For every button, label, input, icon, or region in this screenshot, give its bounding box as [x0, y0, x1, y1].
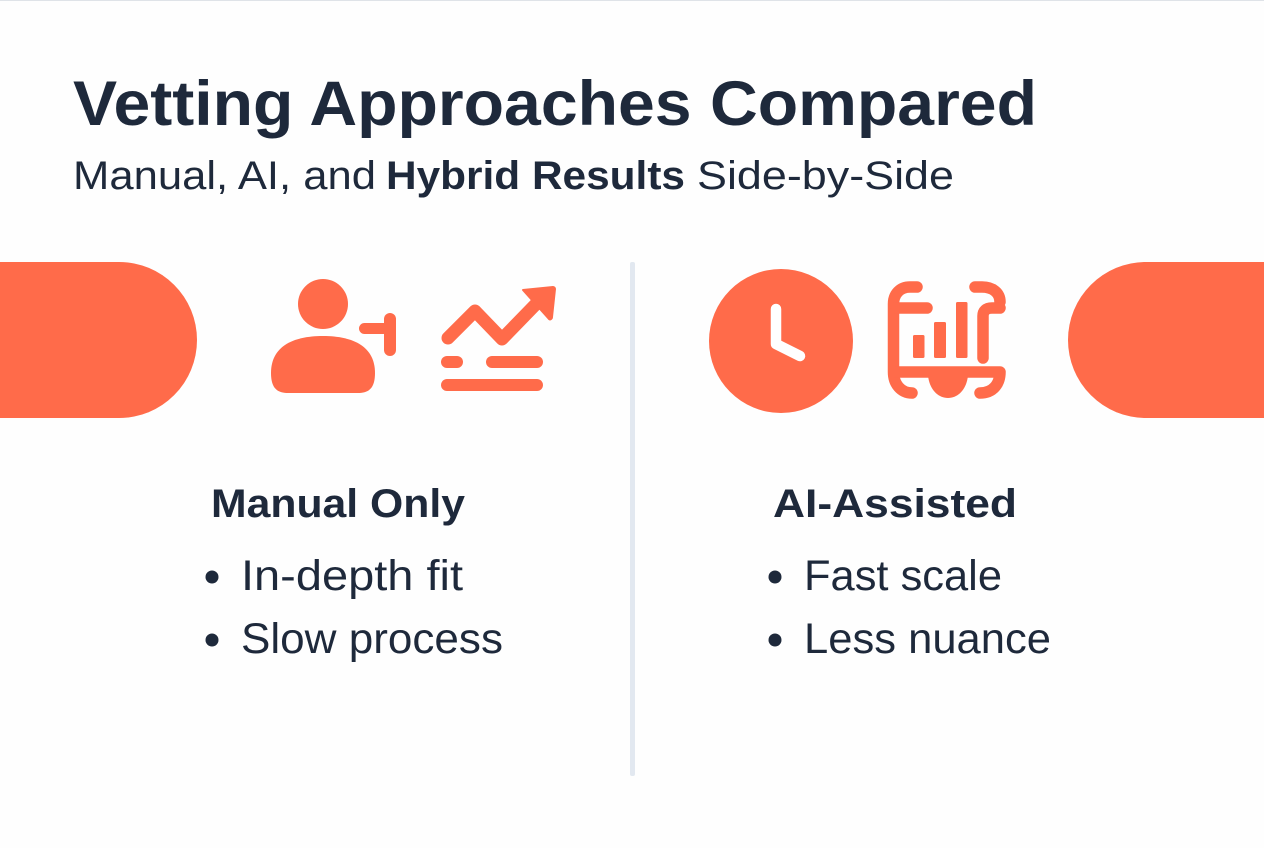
icon: trend chart: [441, 287, 555, 391]
manual bullet list: In-depth fit: [241, 552, 463, 600]
left coral pill: [0, 262, 197, 418]
subtitle: Hybrid Results: [386, 154, 685, 198]
heading: Manual Only: Manual Only: [211, 482, 466, 526]
subtitle: Side-by-Side: [697, 154, 954, 198]
subtitle: Manual, AI, and: [73, 154, 376, 198]
icon: clock: [709, 269, 853, 413]
icon: person with marker: [271, 279, 396, 393]
right coral pill: [1068, 262, 1264, 418]
manual bullet list: [206, 552, 503, 663]
AI bullet list: Less nuance: [804, 615, 1051, 663]
divider: [630, 262, 635, 776]
AI bullet list: [768, 552, 1051, 663]
subtitle: [73, 154, 954, 198]
title: Vetting Approaches Compared: [73, 69, 1037, 139]
heading: AI-Assisted: AI-Assisted: [773, 482, 1017, 526]
manual bullet list: Slow process: [241, 615, 503, 663]
icon: bar chart device: [894, 287, 1000, 398]
AI bullet list: Fast scale: [804, 552, 1002, 600]
